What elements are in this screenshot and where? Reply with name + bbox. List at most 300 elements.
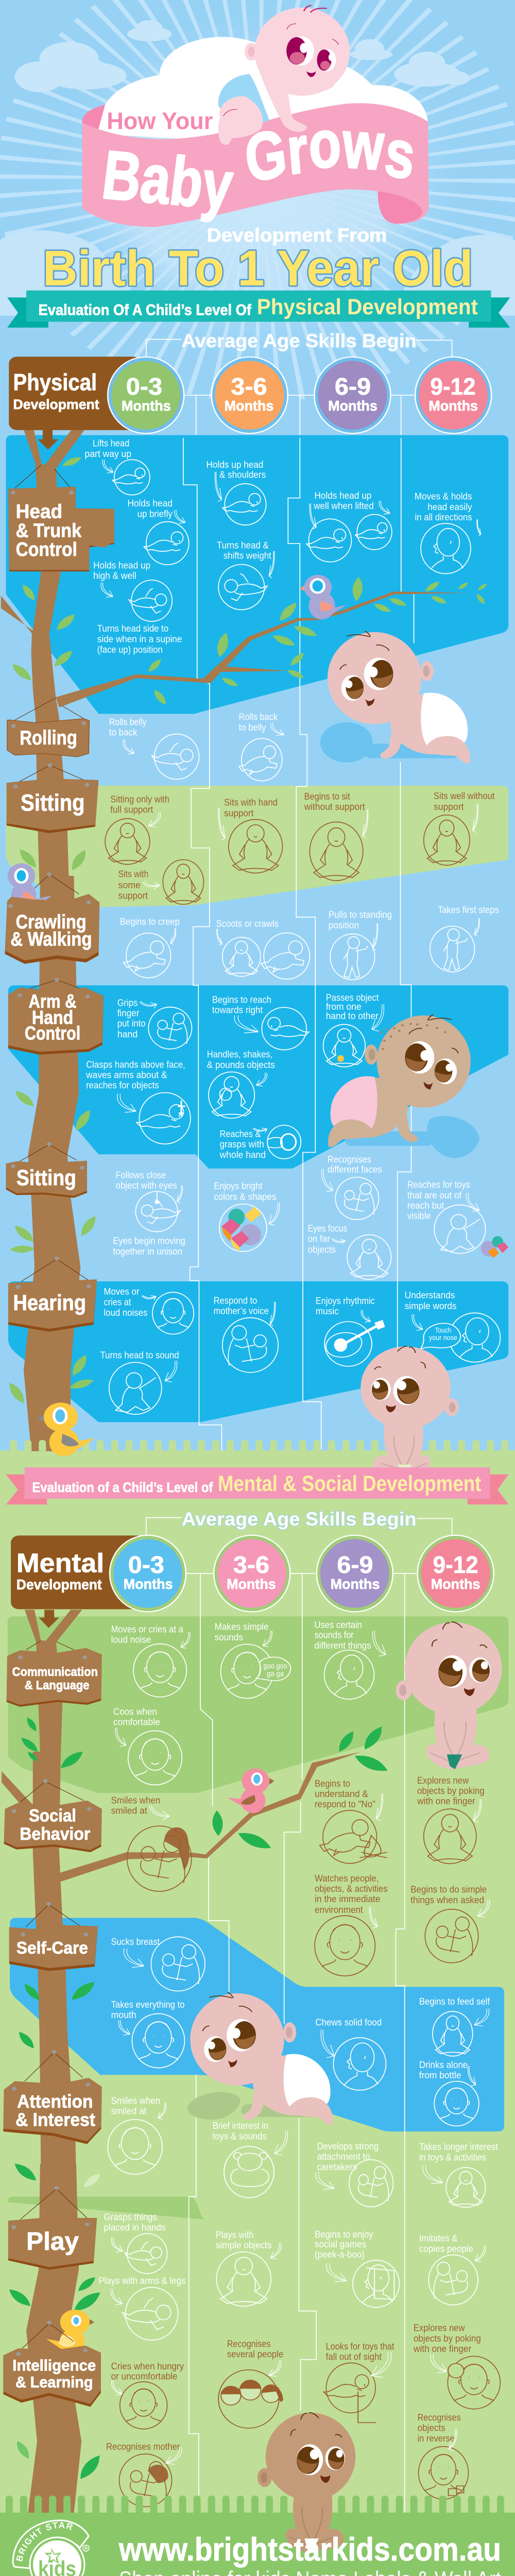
skill: Sits well without support	[424, 791, 495, 865]
skill: Lifts head part way up	[85, 438, 150, 495]
icon: following mobile	[135, 1192, 180, 1232]
pink banner	[82, 103, 428, 227]
skill: Moves & holds head easily: head easily	[427, 502, 472, 512]
icon: drinking	[434, 2081, 479, 2126]
skill: Lifts head part way up: Lifts head	[93, 438, 129, 449]
age circle: 0-3 months: Months	[122, 397, 171, 414]
skill: Drinks alone from bottle: from bottle	[419, 2071, 461, 2081]
skill: Enjoys bright colors & shapes: colors & shapes	[214, 1192, 276, 1202]
skill: Recognises several people	[218, 2339, 283, 2428]
cloud top right small	[350, 39, 392, 60]
skill: Pulls to standing position: Pulls to standing	[329, 910, 392, 920]
header scenery	[0, 6, 515, 436]
skill: Moves or cries at loud noises: Moves or	[104, 1287, 140, 1297]
sign: Physical Development: Physical	[13, 369, 97, 395]
sign: Hearing	[8, 1257, 97, 1332]
icon: watching	[315, 1916, 375, 1976]
icon: holding toy	[216, 2252, 271, 2306]
sign: Self-Care: Self-Care	[16, 1938, 88, 1957]
skill: Follows close object with eyes	[116, 1171, 182, 1232]
skill: Begins to enjoy social games: Begins to enjoy	[315, 2229, 373, 2240]
age circle: 9-12 months: Months	[431, 1575, 480, 1592]
sign: Head & Trunk Control: & Trunk	[16, 519, 82, 541]
skill: Respond to mother's voice	[214, 1296, 278, 1372]
sign: Mental Development: Development	[16, 1576, 102, 1592]
ground clouds	[0, 230, 515, 316]
skill: Grips finger put into hand: finger	[117, 1008, 140, 1019]
skill: Smiles when smiled at: Smiles when	[111, 2096, 160, 2106]
skill: Brief interest in toys and sounds: toys & sounds	[213, 2131, 267, 2142]
skill: Eyes focus on far objects: objects	[308, 1245, 336, 1255]
icon: shifts weight	[218, 565, 267, 609]
skill: Eyes focus on far objects	[308, 1224, 391, 1279]
icon: mother and baby	[222, 1318, 278, 1372]
skill: Brief interest in toys and sounds	[213, 2121, 288, 2198]
skill: Rolls back to belly: to belly	[239, 723, 266, 733]
age bracket lines	[146, 340, 452, 436]
icon: baby lifted	[306, 515, 392, 562]
sign: Rolling	[7, 698, 89, 757]
icon: peek-a-boo	[353, 2260, 400, 2308]
icon: gripping finger	[148, 1007, 192, 1049]
skill: Enjoys rhythmic music: music	[316, 1307, 339, 1317]
sign: Mental Development: Mental	[16, 1548, 104, 1578]
icon: imitating with bucket	[423, 2165, 486, 2208]
skill: Holds head up high & well: high & well	[93, 571, 136, 581]
skill: Clasps hands above face: Clasps hands above face,	[86, 1060, 185, 1070]
icon: goo goo ga ga	[221, 1644, 290, 1698]
icon: turning to sound	[109, 1362, 162, 1414]
icon: holds up head	[222, 484, 266, 525]
icon: goo goo ga ga: ga ga	[267, 1670, 284, 1678]
skill: Explores new objects by poking: with one finger	[413, 2344, 472, 2354]
skill: Watches people and objects: objects, & activities	[315, 1884, 388, 1894]
text: Eyes begin moving together: together in unison	[113, 1247, 182, 1257]
skill: Holds head up well when lifted: well when lifted	[313, 501, 374, 512]
icon: full support	[105, 819, 150, 865]
age circle: 6-9 months	[317, 1535, 393, 1612]
skill: Reaches for toys out of reach: visible	[407, 1211, 431, 1222]
skill: Sitting only with full support: Sitting only with	[110, 794, 169, 805]
skill: Follows close object with eyes: Follows close	[116, 1171, 166, 1181]
skill: Rolls belly to back	[109, 717, 199, 779]
skill: Turns head & shifts weight: Turns head &	[217, 540, 269, 551]
age circle: 9-12 months	[418, 1535, 494, 1612]
skill: Begins to do simple things when asked	[410, 1885, 490, 1963]
age circle: 6-9 months	[314, 357, 390, 433]
icon: touch your nose: your nose	[429, 1334, 457, 1342]
skill: Recognises several people: Recognises	[227, 2339, 271, 2349]
skill: Enjoys rhythmic music	[316, 1296, 385, 1366]
sign: Play: Play	[26, 2227, 79, 2256]
skill: Begins to enjoy social games: (peek-a-boo)	[315, 2250, 365, 2260]
bird: purple on trunk	[8, 863, 52, 909]
skills: sitting	[105, 791, 495, 904]
skill: Plays with simple objects	[216, 2230, 281, 2306]
skill: Turns head to sound	[100, 1350, 179, 1414]
text: Turns head side to side: (face up) position	[97, 645, 163, 655]
age circle: 6-9 months: Months	[331, 1575, 380, 1592]
background: grass	[0, 1450, 515, 2514]
heading: Average Age Skills Begin: Average Age Skills Begin	[182, 1509, 417, 1530]
skill: Holds head up briefly: up briefly	[138, 509, 173, 519]
icon: breastfeeding	[151, 1937, 205, 1991]
skill: Begins to sit without support: without support	[304, 802, 365, 812]
icon: holds head high	[129, 580, 172, 621]
skill: Cries when hungry or uncomfortable: or uncomfortable	[111, 2371, 177, 2382]
skill: Reaches for toys out of reach: that are out of	[407, 1191, 461, 1201]
skill: Enjoys bright colors & shapes	[214, 1181, 280, 1251]
branch: green panel	[59, 1752, 362, 1883]
sign: Attention & Interest	[3, 2050, 102, 2144]
skill: Holds head up high & well	[93, 561, 172, 621]
sign: Intelligence & Learning: & Learning	[15, 2374, 93, 2391]
arrow: sign pointing down	[38, 430, 59, 450]
skill: Recognises objects in reverse: Recognises	[418, 2413, 461, 2423]
skill: Plays with arms & legs	[98, 2276, 185, 2340]
skill: Reaches & grasps with whole hand: grasps with	[220, 1139, 264, 1150]
skill: Rolls belly to back: to back	[109, 727, 138, 738]
sign: Rolling: Rolling	[20, 726, 77, 749]
skill: Moves or cries at a loud noise: loud noise	[111, 1635, 151, 1645]
icon: three faces	[335, 1177, 379, 1219]
age circle: 0-3 months: Months	[124, 1575, 173, 1592]
skill: Sitting only with full support	[105, 794, 169, 865]
text: Turns head side to side: side when in a supine	[97, 634, 182, 645]
skill: Sits with hand support: Sits with hand	[224, 798, 278, 808]
skill: Smiles when smiled at: Smiles when	[111, 1795, 160, 1806]
icon: scooting and crawling	[222, 933, 310, 979]
icon: reaching	[262, 1007, 309, 1050]
skill: Begins to sit without support: Begins to sit	[304, 791, 350, 802]
skill: Makes simple sounds: Makes simple	[214, 1622, 269, 1632]
skill: Begins to understand No: understand &	[315, 1789, 368, 1799]
skill: Looks for toys that fall out of sight: fall out of sight	[326, 2352, 382, 2362]
bird: yellow	[37, 1402, 95, 1456]
baby: sitting, pink 2	[396, 1622, 502, 1769]
skill: Develops strong attachment to caretakers: Develops strong	[317, 2141, 379, 2152]
skill: Sucks breast	[111, 1937, 205, 1991]
title: Baby: Baby	[98, 137, 237, 224]
sign: Physical Development	[9, 357, 141, 430]
skill: Explores new objects by poking: objects by poking	[414, 2333, 481, 2344]
skill: Understands simple words: simple words	[405, 1301, 457, 1311]
skill: Grasps things placed in hands: placed in hands	[104, 2223, 165, 2233]
baby: crawling, green section	[187, 1992, 341, 2126]
skill: Turns head to sound: Turns head to sound	[100, 1350, 179, 1361]
baby: sitting, brown	[258, 2413, 355, 2552]
skill: Enjoys rhythmic music: Enjoys rhythmic	[316, 1296, 375, 1307]
sign: Play	[8, 2186, 97, 2269]
section 6 content	[3, 2160, 505, 2514]
skill: Grips finger put into hand: hand	[117, 1029, 138, 1040]
ribbon: mental and social development	[6, 1467, 508, 1504]
icon: smiling face	[108, 2120, 162, 2174]
skill: Moves or cries at a loud noise	[111, 1624, 190, 1697]
bird: pink on branch	[227, 1769, 274, 1813]
sign: Intelligence & Learning: Intelligence	[12, 2357, 96, 2375]
icon: teddy bear	[224, 2146, 274, 2198]
skill: Reaches for toys out of reach: reach but	[407, 1201, 444, 1211]
icon: first steps	[430, 926, 475, 972]
title: Grows: r	[284, 111, 311, 189]
skill: Turns head & shifts weight: shifts weight	[224, 551, 271, 561]
icon: toy blocks and balls	[219, 1204, 267, 1251]
icon: rolling to belly	[239, 738, 282, 781]
icon: reaching for toy	[136, 1093, 191, 1144]
icon: goo goo ga ga: goo goo	[264, 1663, 287, 1670]
title: Grows: G	[242, 115, 290, 196]
skill: Begins to reach towards right: Begins to reach	[212, 995, 271, 1005]
arrow: sign pointing down	[39, 1610, 59, 1628]
skill: Sits with some support	[118, 860, 203, 904]
icon: poking object	[424, 1809, 476, 1863]
icon: chewing	[333, 2038, 386, 2090]
skill: Recognises objects in reverse: in reverse	[418, 2433, 455, 2444]
sign: Arm & Hand Control: Control	[25, 1023, 80, 1044]
skill: Pulls to standing position: position	[329, 920, 359, 930]
age circle: 0-3 months: 0-3	[128, 1551, 164, 1578]
title: Grows: s	[382, 114, 419, 194]
skill: Smiles when smiled at: smiled at	[111, 1806, 147, 1816]
section 5 content	[3, 1769, 498, 2198]
sign: Social Behavior: Social	[29, 1806, 76, 1826]
sign: Mental Development	[11, 1535, 145, 1609]
skill: Reaches & grasps with whole hand: Reaches &	[220, 1129, 261, 1139]
skill: Recognises objects in reverse: objects	[418, 2423, 445, 2433]
skill: Sits well without support: support	[434, 802, 464, 812]
text: Takes longer interest: in toys & activities	[419, 2153, 486, 2163]
skill: Sits with hand support: support	[224, 808, 254, 819]
icon: baby and fire	[320, 1810, 387, 1863]
skill: Uses certain sounds for different things: Uses certain	[314, 1620, 362, 1630]
icon: startled baby	[152, 1292, 194, 1334]
skill: Holds head up briefly: Holds head	[127, 498, 173, 509]
icon: mother and baby	[127, 1826, 192, 1891]
icon: looking over edge	[323, 2363, 376, 2422]
skill: Follows close object with eyes: object with eyes	[116, 1181, 177, 1191]
skill: Recognises different faces	[322, 1155, 382, 1219]
sign: Crawling & Walking	[5, 872, 99, 964]
cloud top right	[394, 52, 470, 87]
tree trunk: mental section	[2, 1610, 82, 2513]
skill: Chews solid food	[315, 2018, 386, 2090]
skill: Takes first steps	[430, 905, 499, 972]
banner curl	[377, 191, 422, 224]
skill: Pulls to standing position	[329, 910, 392, 980]
skill: Reaches & grasps with whole hand	[219, 1123, 301, 1160]
icon: pointing	[324, 1650, 374, 1699]
skill: Imitates & copies people	[419, 2233, 486, 2305]
skill: Rolls back to belly	[239, 712, 284, 781]
subtitle: Development From: Development From	[207, 225, 387, 246]
skill: Imitates & copies people: Imitates &	[419, 2233, 458, 2244]
sun rays	[115, 56, 404, 301]
skill: Understands simple words	[405, 1291, 500, 1362]
skill: Imitates & copies people: copies people	[419, 2244, 473, 2254]
age circle: 9-12 months: 9-12	[433, 1551, 478, 1578]
skill: Sitting only with full support: full support	[110, 805, 153, 815]
icon: guitar	[324, 1320, 385, 1366]
title: Grows: w	[341, 107, 386, 184]
skill: Develops strong attachment to caretakers	[317, 2141, 379, 2173]
skill: Recognises different faces: Recognises	[328, 1155, 371, 1165]
skill: Sits with some support: support	[118, 891, 148, 901]
skill: Moves & holds head easily: Moves & holds	[415, 492, 472, 502]
skill: Sucks breast: Sucks breast	[111, 1937, 160, 1947]
age circle: 3-6 months	[212, 357, 288, 433]
skill: Explores new objects by poking	[417, 1775, 485, 1863]
skill: Lifts head part way up: part way up	[85, 449, 131, 459]
ribbon: physical development	[7, 291, 510, 328]
skill: Clasps hands above face: reaches for objects	[86, 1080, 159, 1091]
logo: Bright Star Kids: R	[84, 2546, 88, 2551]
skill: Brief interest in toys and sounds: Brief interest in	[213, 2121, 268, 2131]
sign: Head & Trunk Control	[8, 465, 114, 571]
skill: Holds head up briefly	[127, 498, 189, 565]
sign: Crawling & Walking: & Walking	[10, 928, 92, 950]
sign: Intelligence & Learning	[3, 2320, 101, 2407]
icon: grasping ring	[267, 1125, 301, 1159]
sign: Arm & Hand Control	[8, 978, 104, 1055]
skill: Enjoys bright colors & shapes: Enjoys bright	[214, 1181, 263, 1192]
skill: Develops strong attachment to caretakers: caretakers	[317, 2162, 357, 2173]
sign: Communication & Language: & Language	[25, 1678, 89, 1692]
text: Turns head side to side	[97, 624, 182, 655]
skill: Begins to do simple things when asked: things when asked	[410, 1895, 484, 1905]
age circle: 6-9 months: Months	[328, 397, 377, 414]
section 2 content	[7, 430, 495, 904]
icon: lifts head	[112, 460, 150, 495]
skill: Moves & holds head easily	[415, 492, 481, 573]
tree trunk: physical section	[1, 430, 85, 1451]
skill: Uses certain sounds for different things: different things	[314, 1640, 371, 1651]
skill: Sits with some support: some	[118, 880, 141, 890]
panel: arm and hand control background	[8, 986, 508, 1168]
skills: communication	[111, 1620, 386, 1785]
panel: communication background	[8, 1616, 508, 1793]
icon: touch your nose: Touch	[435, 1326, 451, 1334]
skill: Moves or cries at loud noises	[104, 1287, 194, 1334]
skill: Plays with arms & legs: Plays with arms & legs	[98, 2276, 185, 2286]
age circle: 3-6 months: 3-6	[233, 1551, 269, 1578]
skill: Coos when comfortable: Coos when	[113, 1707, 157, 1717]
skill: Watches people and objects: environment	[315, 1905, 363, 1915]
sign: Crawling & Walking: Crawling	[16, 910, 87, 933]
skill: Grips finger put into hand	[117, 996, 192, 1049]
text: Takes longer interest	[419, 2142, 498, 2163]
text: Turns head side to side: Turns head side to	[97, 624, 168, 634]
skill: Begins to creep	[120, 917, 180, 978]
icon: crying baby	[120, 2382, 167, 2429]
skill: Watches people and objects	[315, 1874, 388, 1976]
title: How Your: How Your	[107, 107, 213, 134]
skill: Recognises objects in reverse	[418, 2413, 469, 2499]
leaves: physical section	[6, 455, 488, 1405]
skill: Begins to enjoy social games	[315, 2229, 400, 2308]
skill: Begins to feed self	[419, 1997, 490, 2056]
age circle: 3-6 months: Months	[227, 1575, 276, 1592]
skill: Rolls belly to back: Rolls belly	[109, 717, 147, 727]
skills: self-care	[108, 1937, 498, 2198]
skill: Holds head up well when lifted	[306, 491, 392, 562]
icon: three people	[218, 2370, 283, 2428]
skill: Handles, shakes & pounds objects	[207, 1049, 275, 1118]
skill: Passes object from hand to hand: hand to other	[326, 1011, 379, 1022]
leaves: mental section	[6, 1716, 390, 2482]
skill: Smiles when smiled at	[108, 2096, 166, 2174]
icon: creeping	[124, 933, 171, 978]
skill: Holds head up well when lifted: Holds head up	[314, 491, 371, 501]
fence: sky to grass	[10, 1440, 515, 1451]
icon: watching birds	[347, 1235, 391, 1279]
icon: without support	[310, 822, 363, 880]
footer fence	[6, 2496, 505, 2514]
skills: social behaviour	[111, 1775, 490, 1976]
cloud top centre	[127, 20, 172, 41]
icon: poking ball	[448, 2356, 500, 2409]
skill: Recognises mother: Recognises mother	[106, 2442, 180, 2452]
skill: Passes object from hand to hand: Passes object	[326, 993, 379, 1003]
pink banner back fold	[82, 105, 105, 131]
age circle: 0-3 months	[108, 357, 184, 433]
skill: Makes simple sounds	[214, 1622, 290, 1698]
skill: Smiles when smiled at	[111, 1795, 192, 1891]
text: Eyes begin moving together: Eyes begin moving	[113, 1236, 185, 1246]
skill: Holds up head & shoulders	[207, 460, 266, 525]
icon: smiling face	[128, 1731, 182, 1785]
skill: Eyes focus on far objects: on far	[308, 1234, 330, 1244]
skills: play	[98, 2212, 486, 2340]
age circle: 3-6 months	[214, 1535, 290, 1612]
skill: Scoots or crawls: Scoots or crawls	[216, 919, 279, 929]
skill: Sits with some support: Sits with	[118, 869, 148, 879]
branch: blue panel	[56, 591, 470, 707]
footer band	[0, 2513, 515, 2576]
skill: Watches people and objects: in the immediate	[315, 1894, 381, 1905]
sign: Social Behavior	[4, 1779, 102, 1852]
skill: Uses certain sounds for different things	[314, 1620, 386, 1699]
skill: Recognises several people: several people	[227, 2349, 283, 2360]
age circle: 3-6 months: Months	[225, 397, 273, 414]
skill: Recognises different faces: different faces	[328, 1165, 382, 1175]
skill: Explores new objects by poking: with one finger	[417, 1796, 475, 1806]
icon: shaking ball	[209, 1072, 254, 1118]
sign: Arm & Hand Control: Hand	[32, 1007, 73, 1028]
sign: Hearing: Hearing	[13, 1290, 86, 1315]
skill: Moves or cries at loud noises: cries at	[104, 1297, 131, 1308]
skill: Cries when hungry or uncomfortable: Cries when hungry	[111, 2361, 184, 2371]
skills: crawling and walking	[85, 905, 508, 1279]
skill: Begins to reach towards right	[212, 995, 309, 1050]
skills: head and trunk	[85, 438, 481, 781]
skill: Rolls back to belly: Rolls back	[239, 712, 278, 722]
icon: hand support	[229, 820, 283, 873]
baby: sitting, pink 1	[360, 1346, 459, 1478]
icon: passing object	[323, 1024, 365, 1067]
skills: attention icons continued	[316, 2160, 486, 2208]
skill: Grips finger put into hand: put into	[117, 1019, 146, 1029]
skill: Recognises mother	[106, 2442, 182, 2507]
skill: Holds up head & shoulders: Holds up head	[207, 460, 264, 470]
skill: Scoots or crawls	[216, 919, 310, 979]
skill: Begins to understand No: respond to "No"	[315, 1799, 375, 1809]
skill: Begins to do simple things when asked: Begins to do simple	[410, 1885, 487, 1895]
skill: Makes simple sounds: sounds	[214, 1633, 243, 1643]
baby: crawling, white nappy	[320, 631, 479, 765]
skill: Explores new objects by poking: objects by poking	[417, 1786, 485, 1796]
icon: baby with blocks	[419, 2447, 469, 2499]
